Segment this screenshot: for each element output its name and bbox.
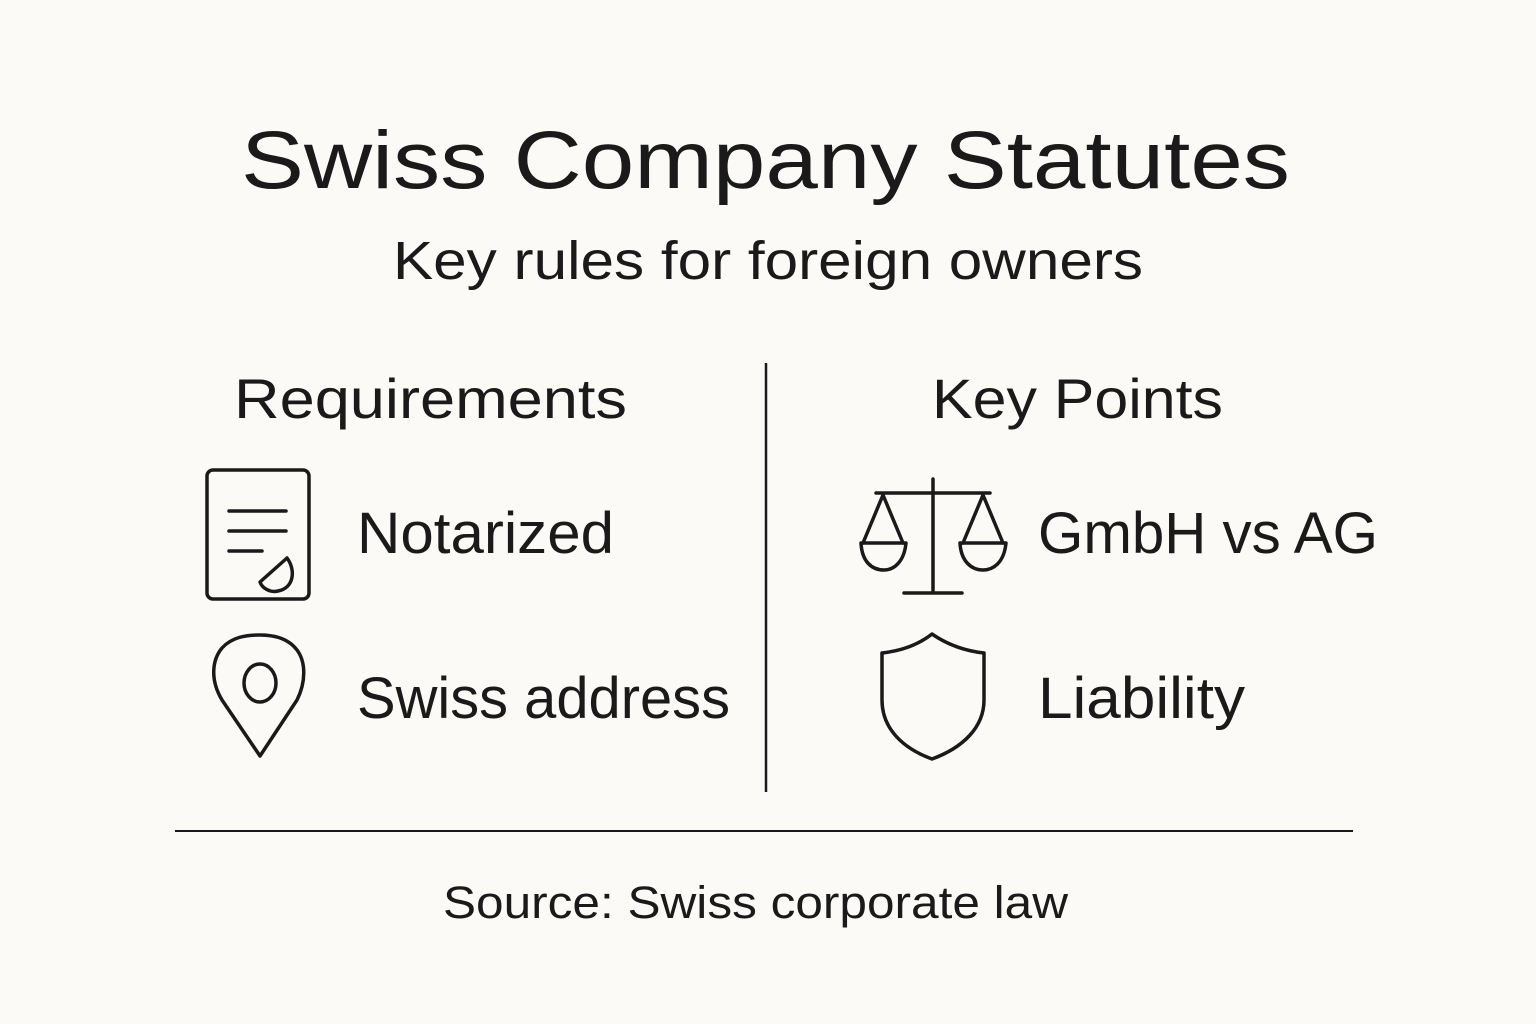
icon: notarized document [207, 470, 309, 599]
title: Swiss Company Statutes [241, 115, 1290, 206]
text: GmbH vs AG: GmbH vs AG [1038, 501, 1378, 566]
text: Swiss address: Swiss address [357, 666, 730, 731]
icon: shield [882, 634, 984, 759]
icon: scales [861, 479, 1006, 593]
panel: requirements [207, 367, 730, 756]
heading: Key Points: Key Points [932, 367, 1223, 430]
subtitle: Key rules for foreign owners [393, 231, 1143, 291]
icon: location pin [214, 635, 304, 756]
source note: Source: Swiss corporate law [443, 877, 1069, 928]
heading: Requirements: Requirements [234, 367, 627, 430]
text: Liability: Liability [1038, 666, 1245, 731]
panel: key points [861, 367, 1378, 759]
text: Notarized: Notarized [357, 501, 614, 566]
